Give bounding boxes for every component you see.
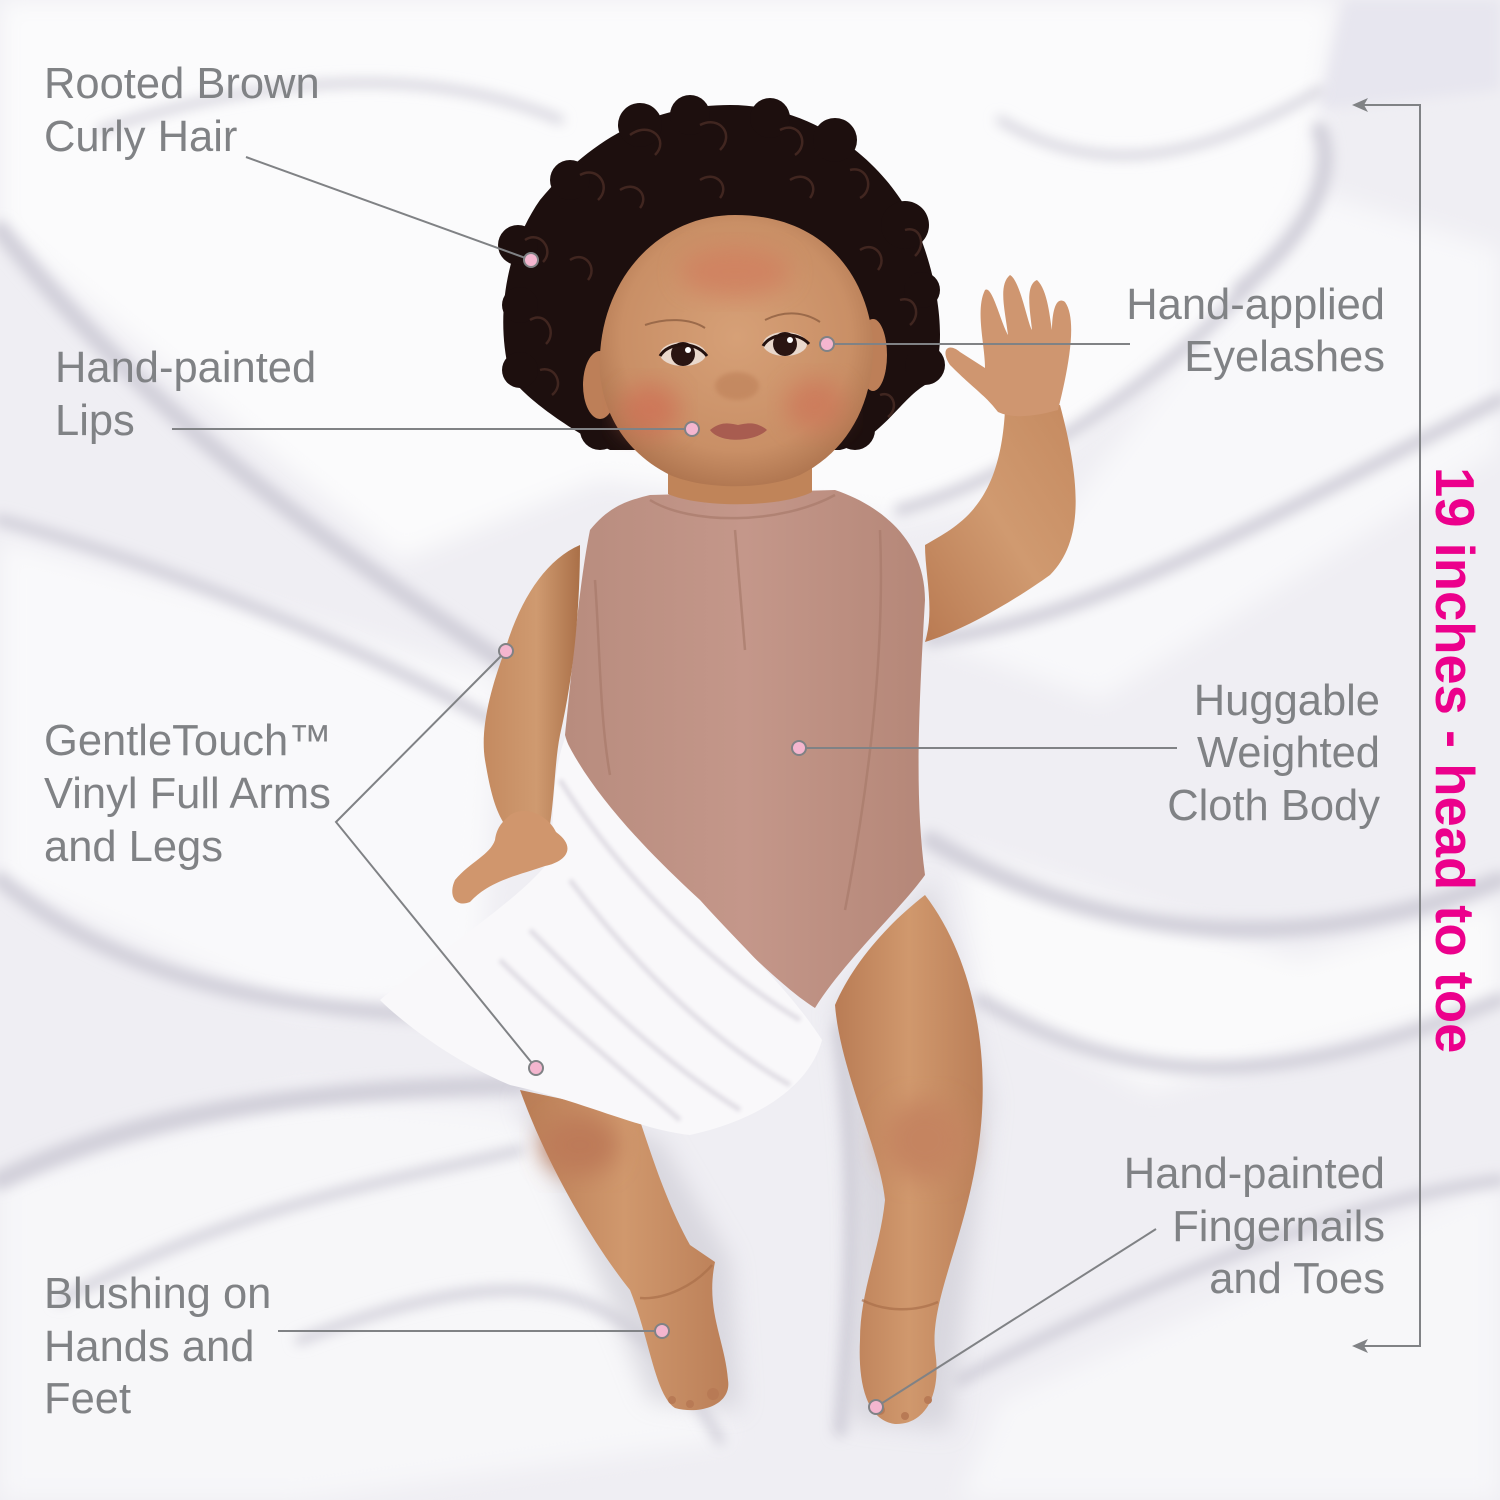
label: vinyl arms and legs: and Legs (44, 823, 223, 871)
left hand (452, 811, 567, 903)
label: fingernails and toes: Fingernails (1172, 1203, 1385, 1251)
hair curl highlights (525, 122, 921, 417)
doll (380, 95, 1076, 1424)
label: blushing: Blushing on (44, 1270, 271, 1318)
cloth body (565, 490, 925, 1008)
label: cloth body: Huggable (1194, 677, 1380, 725)
label: cloth body: Weighted (1197, 729, 1380, 777)
label: fingernails and toes: Hand-painted (1124, 1150, 1385, 1198)
label: blushing: Feet (44, 1375, 131, 1423)
neck (668, 450, 812, 504)
callout dots (499, 253, 883, 1414)
shadow around doll (520, 880, 990, 1430)
callout leader lines (172, 157, 1177, 1407)
lips (710, 423, 767, 440)
label: lips: Hand-painted (55, 344, 316, 392)
toes (668, 1388, 932, 1420)
face (600, 215, 873, 486)
label: eyelashes: Hand-applied (1126, 281, 1385, 329)
label: rooted hair: Rooted Brown (44, 60, 320, 108)
label: fingernails and toes: and Toes (1209, 1255, 1385, 1303)
ears (583, 351, 617, 419)
label: cloth body: Cloth Body (1167, 782, 1380, 830)
ankle creases (640, 1265, 938, 1309)
left leg (520, 1090, 728, 1410)
label: eyelashes: Eyelashes (1184, 333, 1385, 381)
label: blushing: Hands and (44, 1323, 254, 1371)
right arm and hand (925, 405, 1076, 642)
cheeks and forehead blush (680, 247, 790, 297)
label: rooted hair: Curly Hair (44, 113, 237, 161)
right leg (835, 895, 983, 1424)
left arm (484, 545, 580, 825)
swaddle blanket (380, 738, 822, 1135)
hair (498, 95, 945, 450)
label: vinyl arms and legs: GentleTouch™ (44, 717, 332, 765)
height measurement arrow (1352, 98, 1420, 1353)
label: vinyl arms and legs: Vinyl Full Arms (44, 770, 331, 818)
nose (715, 372, 759, 400)
label: lips: Lips (55, 397, 135, 445)
eyes (660, 332, 809, 366)
eyebrows (645, 313, 820, 328)
height label: 19 inches - head to toe (1424, 467, 1485, 1053)
